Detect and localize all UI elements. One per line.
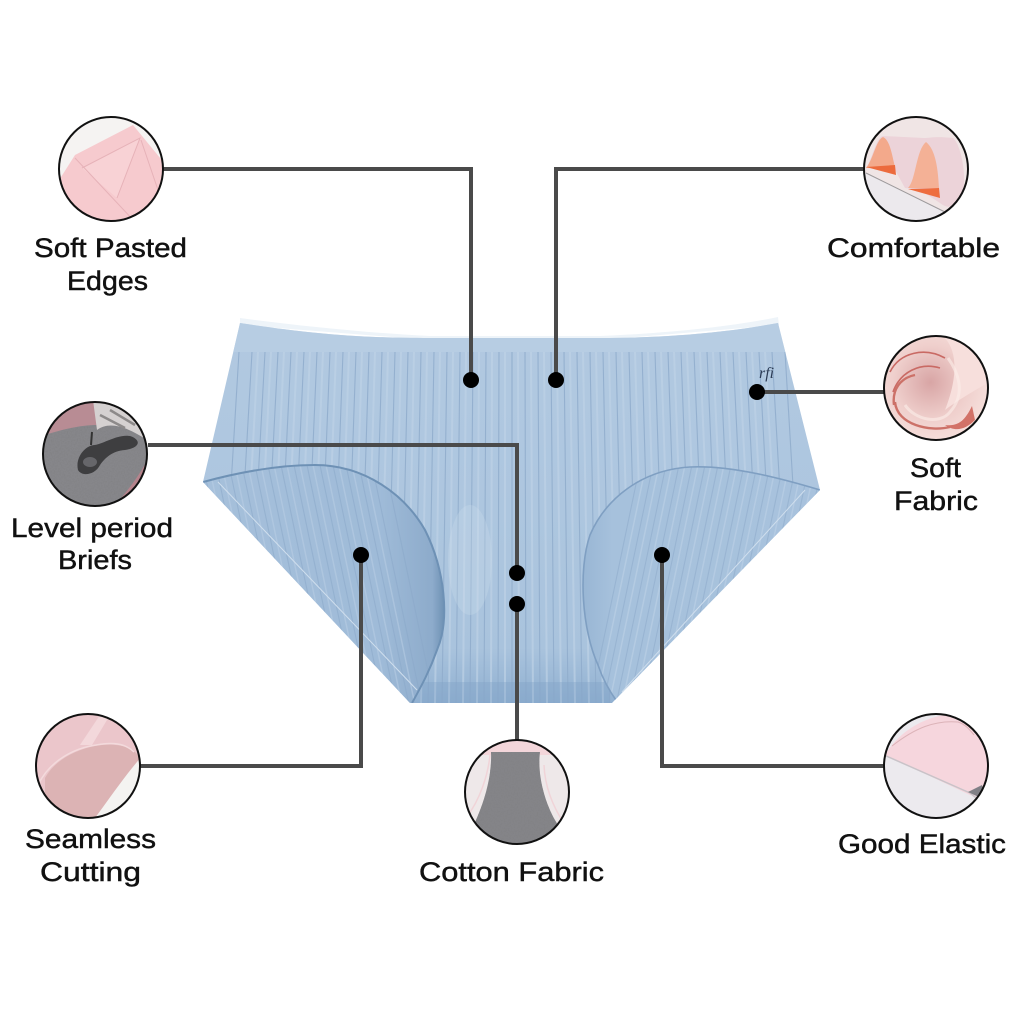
label: seamless cutting: Seamless	[25, 824, 156, 854]
line: soft pasted edges	[163, 169, 471, 380]
icon: comfortable	[860, 115, 972, 225]
label: soft fabric	[894, 453, 978, 516]
waistband white edge	[240, 317, 779, 340]
line: seamless cutting	[140, 555, 361, 766]
label: soft pasted edges: Soft Pasted	[34, 233, 187, 263]
line: cotton fabric	[515, 604, 519, 740]
left leg panel	[203, 466, 444, 703]
centre highlight	[448, 505, 492, 615]
leg outline stitches	[203, 465, 444, 703]
label: seamless cutting: Cutting	[40, 857, 141, 887]
label: soft pasted edges: Edges	[67, 266, 148, 296]
icon: good elastic	[882, 712, 992, 822]
label: comfortable: Comfortable	[827, 233, 1000, 263]
icon: seamless cutting	[33, 712, 143, 822]
icon: level period briefs	[40, 400, 150, 510]
icon: soft fabric	[883, 335, 989, 441]
icon: soft pasted edges	[58, 116, 164, 222]
line: comfortable	[556, 169, 865, 380]
label: soft fabric: Fabric	[894, 486, 978, 516]
small logo: rfi	[759, 365, 774, 382]
label: soft pasted edges	[34, 233, 187, 296]
label: level period briefs: Level period	[11, 513, 173, 543]
line: level period briefs	[148, 445, 517, 573]
ribbon	[866, 136, 964, 207]
line: soft fabric	[757, 390, 885, 394]
label: level period briefs: Briefs	[58, 545, 132, 575]
product: blue ribbed briefs	[190, 315, 825, 707]
marker dots	[353, 372, 765, 612]
label: soft fabric: Soft	[910, 453, 962, 483]
icon: cotton fabric	[462, 738, 572, 850]
label: seamless cutting	[25, 824, 156, 887]
right leg panel	[584, 468, 820, 700]
label: cotton fabric: Cotton Fabric	[419, 857, 604, 887]
connector lines	[140, 169, 885, 766]
shade at bottom	[420, 682, 610, 704]
label: good elastic: Good Elastic	[838, 829, 1006, 859]
label: level period briefs	[11, 513, 173, 575]
line: good elastic	[662, 555, 885, 766]
